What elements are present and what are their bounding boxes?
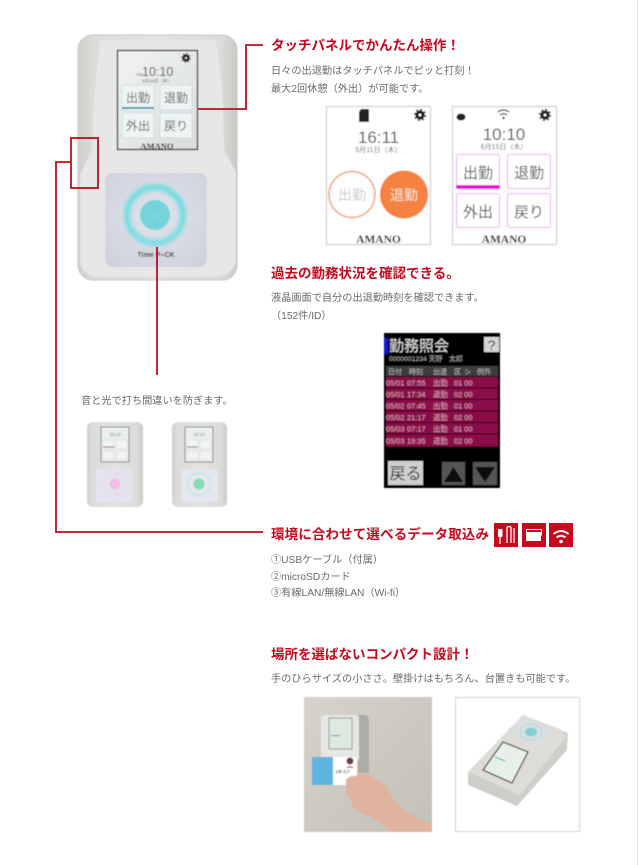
attendance query screen: 時刻 — [409, 367, 423, 376]
attendance query screen: ? — [488, 337, 496, 353]
screen example: wifi buttons: 10:10 — [483, 125, 525, 144]
table rows: 01 00 — [454, 402, 472, 410]
touch screen: 外出 — [126, 119, 150, 133]
table rows: 07:17 — [407, 424, 426, 434]
table rows: 退勤 — [433, 390, 448, 399]
icon: gear — [540, 110, 550, 120]
arrow down button — [473, 462, 497, 485]
table rows: 07:55 — [407, 378, 426, 388]
table rows: 05/02 — [386, 413, 404, 422]
screen example: wifi buttons — [452, 106, 556, 246]
screen example: wifi buttons: 出勤 — [463, 165, 493, 182]
table rows: 出勤 — [433, 378, 448, 388]
text block: compact description: 手のひらサイズの小ささ。壁掛けはもちろん、台置きも可能です。 — [271, 672, 575, 685]
attendance query screen: 勤務照会 — [389, 338, 449, 355]
table rows: 02 00 — [454, 413, 472, 422]
table rows: 02 00 — [454, 390, 472, 399]
screen example: wifi buttons: 退勤 — [514, 165, 544, 182]
text block: touch panel description: 最大2回休憩（外出）が可能です。 — [271, 82, 428, 95]
table rows — [386, 377, 498, 446]
device on desk — [468, 715, 568, 806]
screen example: SD clock in — [326, 106, 430, 246]
table rows: 出勤 — [433, 424, 448, 434]
text block: attendance description: （152件/ID） — [271, 310, 332, 322]
card reader panel: IC — [152, 213, 158, 220]
card reader panel: Time P●CK — [137, 252, 175, 259]
attendance query screen: 出退 — [433, 367, 447, 376]
screen example: wifi buttons: 戻り — [514, 204, 544, 221]
table rows: 05/01 — [386, 390, 404, 399]
touch screen — [118, 50, 198, 151]
small terminal: green light — [172, 422, 227, 507]
small terminal: green light: 10:10 — [193, 432, 205, 437]
icon: USB cable — [494, 523, 518, 547]
ID card: 天野 花子 — [335, 769, 350, 774]
table rows: 02 00 — [454, 436, 472, 446]
attendance query screen: 日付 — [388, 367, 402, 376]
hand — [346, 773, 432, 832]
table rows: 21:17 — [407, 413, 426, 422]
icon: SD card — [359, 109, 369, 122]
screen example: wifi buttons: AMANO — [482, 234, 526, 246]
caption: sound and light: 音と光で打ち間違いを防ぎます。 — [81, 394, 233, 407]
table rows: 07:45 — [407, 402, 426, 410]
screen example: wifi buttons: 外出 — [463, 204, 493, 221]
screen example: SD clock in: 出勤 — [338, 187, 366, 203]
photo: wall mounted with card — [304, 697, 432, 832]
icon: gear — [415, 110, 425, 120]
back button — [388, 461, 423, 485]
icon: microSD card — [522, 523, 546, 547]
table rows: 01 00 — [454, 378, 472, 388]
text block: touch panel description: 日々の出退勤はタッチパネルでピッと打刻！ — [271, 64, 475, 77]
table rows: 退勤 — [433, 436, 448, 446]
table rows: 05/03 — [386, 424, 404, 434]
attendance query screen — [384, 333, 500, 488]
touch screen: 出勤 — [126, 91, 150, 105]
screen example: SD clock in: 16:11 — [358, 128, 399, 147]
icon: wifi — [549, 523, 573, 547]
table rows: 05/01 — [386, 378, 404, 388]
table rows: 19:35 — [407, 436, 426, 446]
small terminal: pink light: 10:10 — [109, 432, 121, 437]
touch screen: AM — [136, 72, 143, 77]
attendance query screen: 0000001234 天野 太郎 — [389, 354, 463, 363]
icon: wifi — [498, 110, 509, 115]
callout lines and highlight box — [56, 45, 263, 532]
heading: attendance history: 過去の勤務状況を確認できる。 — [271, 265, 460, 281]
text block: data import list: ③有線LAN/無線LAN（Wi-fi） — [271, 586, 405, 599]
touch screen: 戻り — [164, 119, 188, 133]
table rows: 01 00 — [454, 424, 472, 434]
text block: data import list: ②microSDカード — [271, 571, 351, 583]
touch screen: 10:10 — [142, 65, 173, 79]
screen example: SD clock in: 5月11日（木） — [355, 145, 402, 154]
text block: data import list: ①USBケーブル（付属） — [271, 553, 383, 566]
table rows: 退勤 — [433, 413, 448, 422]
touch screen: 6月15日（木） — [142, 78, 172, 84]
table rows: 05/03 — [386, 436, 404, 446]
icon: felica — [456, 114, 466, 120]
photo: desk-standing terminal — [456, 698, 580, 832]
device body — [78, 35, 237, 280]
card reader panel — [105, 173, 207, 267]
attendance query screen: 例外 — [477, 367, 491, 376]
heading: data import: 環境に合わせて選べるデータ取込み — [271, 526, 489, 542]
table rows: 17:34 — [407, 390, 426, 399]
product photo: main terminal — [78, 35, 237, 280]
screen example: wifi buttons: 6月15日（木） — [481, 142, 527, 151]
attendance query screen: 戻る — [389, 466, 422, 483]
screen example: SD clock in: AMANO — [356, 234, 401, 246]
table rows: 出勤 — [433, 402, 448, 410]
heading: touch panel: タッチパネルでかんたん操作！ — [271, 37, 460, 53]
heading: compact design: 場所を選ばないコンパクト設計！ — [271, 646, 474, 662]
touch screen: AMANO — [140, 141, 174, 151]
text block: attendance description: 液晶画面で自分の出退勤時刻を確認できます。 — [271, 291, 484, 304]
arrow up button — [442, 462, 465, 485]
attendance query screen: 区 — [454, 368, 461, 376]
small terminal: pink light — [87, 422, 143, 507]
screen example: SD clock in: 退勤 — [390, 187, 418, 203]
table rows: 05/02 — [386, 402, 404, 410]
touch screen: 退勤 — [164, 91, 188, 105]
attendance query screen: シ — [464, 369, 471, 376]
